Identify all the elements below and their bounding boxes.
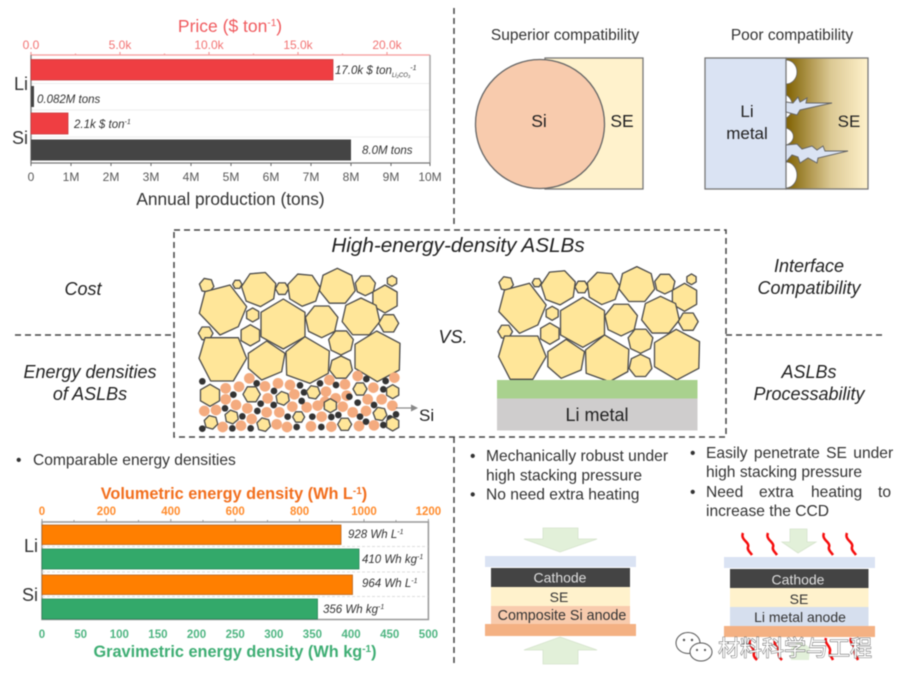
label: interface compatibility: Interface — [774, 256, 844, 276]
SE block with gradient — [786, 58, 868, 189]
gravimetric tick labels: 100 — [110, 629, 129, 641]
category labels — [12, 74, 28, 148]
panel: poor compatibility — [705, 27, 868, 189]
panel: cost bar chart — [12, 16, 442, 209]
bar value labels: -1 — [410, 65, 417, 72]
SE layer: SE — [550, 589, 568, 605]
bullet text: • — [16, 452, 21, 469]
bar value labels: 964 Wh L — [362, 578, 411, 590]
price axis tick labels: 20.0k — [372, 38, 403, 52]
production axis tick labels: 9M — [383, 170, 399, 184]
volumetric tick labels: 200 — [97, 506, 116, 518]
heading: Poor compatibility — [731, 27, 853, 44]
labels: SE — [610, 111, 634, 131]
panel: energy density chart — [16, 452, 441, 661]
arrow: bottom pressure — [524, 637, 597, 664]
bullet text: to — [878, 484, 891, 501]
bullet text: Need — [706, 484, 743, 501]
price axis tick labels: 0.0 — [23, 38, 40, 52]
bar value labels: 8.0M tons — [362, 145, 413, 157]
volumetric tick labels: 0 — [39, 506, 45, 518]
gravimetric axis title: -1 — [362, 644, 372, 655]
bullet text: extra — [759, 484, 794, 501]
green interlayer — [497, 380, 698, 398]
bullet text: high stacking pressure — [486, 468, 642, 484]
volumetric axis title: -1 — [353, 486, 362, 497]
cathode layer — [730, 569, 868, 588]
SE layer: SE — [790, 591, 808, 607]
gravimetric axis title: ) — [371, 643, 377, 661]
gravimetric tick labels: 500 — [419, 629, 438, 641]
category labels: Si — [22, 585, 38, 605]
text: VS.: VS. — [438, 327, 468, 347]
bar value labels: -1 — [411, 578, 418, 585]
bottom plate — [485, 624, 636, 636]
gravimetric tick labels: 450 — [380, 629, 399, 641]
solid electrolyte particles — [196, 382, 402, 433]
gravimetric tick labels: 250 — [226, 629, 245, 641]
gravimetric tick labels: 350 — [303, 629, 322, 641]
bar value labels: 356 Wh kg — [323, 604, 378, 616]
SE layer — [491, 587, 630, 606]
production axis tick labels: 3M — [143, 170, 159, 184]
bullet text: • — [470, 448, 475, 465]
Li metal block — [705, 58, 786, 189]
production axis tick labels: 6M — [263, 170, 279, 184]
cathode layer — [491, 568, 630, 587]
labels: SE — [838, 112, 860, 131]
category labels: Li — [14, 74, 28, 94]
gravimetric tick labels: 0 — [39, 629, 45, 641]
bullet text: No need extra heating — [486, 486, 639, 504]
heat waves: bottom — [750, 638, 858, 660]
label: interface compatibility: Compatibility — [757, 278, 862, 298]
production axis tick labels: 1M — [63, 170, 79, 184]
composite Si anode layer: Composite Si anode — [498, 608, 626, 624]
SE block — [545, 58, 643, 189]
category labels — [22, 536, 38, 605]
gravimetric tick labels: 300 — [264, 629, 283, 641]
production axis tick labels: 10M — [418, 170, 442, 184]
labels — [726, 102, 860, 143]
Si particle — [476, 60, 604, 188]
panel: superior compatibility — [476, 27, 643, 189]
bar: Li price — [31, 60, 333, 80]
volumetric tick labels: 1200 — [416, 506, 441, 518]
cathode layer: Cathode — [772, 572, 825, 588]
arrow: top pressure — [524, 528, 597, 552]
top plate — [724, 557, 875, 568]
panel: central comparison box — [174, 230, 726, 437]
price axis tick labels: 15.0k — [283, 38, 314, 52]
section labels — [23, 256, 866, 404]
gravimetric tick labels: 200 — [187, 629, 206, 641]
volumetric tick labels: 600 — [226, 506, 245, 518]
bullet text: increase the CCD — [706, 503, 829, 520]
bar: Si production — [31, 140, 351, 160]
bar value labels: 2.1k $ ton — [74, 119, 125, 131]
bullet text: Mechanically robust under — [486, 448, 668, 465]
price axis tick labels: 10.0k — [194, 38, 225, 52]
category labels: Li — [24, 536, 38, 556]
interface voids — [786, 60, 797, 188]
bullet text: • — [470, 486, 475, 504]
heading: price axis title: Price ($ ton — [178, 16, 267, 36]
panel: Li metal processability — [690, 445, 893, 660]
volumetric tick labels — [39, 506, 441, 518]
production axis tick labels: 7M — [303, 170, 319, 184]
bar: Si price — [31, 113, 68, 134]
bottom plate — [724, 626, 875, 637]
arrow: top pressure — [782, 529, 816, 553]
bullet text — [690, 445, 893, 520]
category labels: Si — [12, 128, 28, 148]
volumetric tick labels: 400 — [161, 506, 180, 518]
title: High-energy-density ASLBs — [331, 234, 585, 257]
bar value labels: Li₂CO₃ — [392, 73, 411, 79]
volumetric axis title: ) — [362, 485, 367, 503]
production axis tick labels: 2M — [103, 170, 119, 184]
heading: price axis title: -1 — [267, 18, 277, 29]
bar: Si gravimetric — [42, 599, 318, 619]
bar value labels: -1 — [125, 119, 131, 126]
gravimetric axis title: Gravimetric energy density (Wh kg — [93, 643, 362, 661]
lithium dendrites — [786, 97, 848, 163]
bar: Li volumetric — [42, 525, 341, 544]
SE layer — [730, 588, 868, 607]
arrow: bottom pressure — [791, 640, 810, 660]
bar value labels: 410 Wh kg — [362, 554, 417, 566]
bar value labels — [323, 529, 423, 616]
bullet text: heating — [811, 484, 862, 501]
gravimetric tick labels — [39, 629, 438, 641]
bar value labels: 928 Wh L — [348, 529, 397, 541]
panel: composite Si processability — [470, 448, 668, 664]
bullet text: Easily penetrate SE under — [706, 445, 893, 462]
production axis tick labels: 0 — [28, 170, 35, 184]
heading: price axis title: ) — [276, 16, 282, 36]
bullet text: • — [690, 445, 695, 462]
bar: Li gravimetric — [42, 549, 359, 569]
Li metal anode layer — [730, 607, 868, 626]
labels: Li — [740, 102, 754, 121]
cathode layer: Cathode — [534, 570, 587, 586]
volumetric tick labels: 800 — [290, 506, 309, 518]
cathode particles: composite Si cell — [198, 268, 403, 383]
labels: metal — [726, 124, 768, 143]
price axis tick labels — [23, 38, 403, 52]
label: energy densities: Energy densities — [23, 362, 157, 382]
production axis tick labels — [28, 170, 442, 184]
label: cost: Cost — [64, 279, 103, 299]
heat waves: top — [742, 533, 856, 555]
top plate — [485, 556, 636, 567]
bullet text: • — [690, 484, 695, 501]
bullet text: high stacking pressure — [706, 464, 862, 481]
labels: Si — [531, 111, 547, 131]
labels — [531, 111, 634, 131]
production axis tick labels: 4M — [183, 170, 199, 184]
production axis tick labels: 5M — [223, 170, 239, 184]
composite Si anode layer — [196, 371, 402, 433]
Li metal anode layer: Li metal anode — [754, 609, 846, 625]
watermark text: 材料科学与工程 — [718, 631, 872, 663]
bar value labels — [37, 65, 417, 157]
bar value labels: 17.0k $ ton — [335, 65, 392, 77]
icon: chat bubbles — [676, 632, 712, 661]
bar value labels: -1 — [397, 529, 404, 536]
gravimetric tick labels: 50 — [74, 629, 87, 641]
arrow and Si label: Si — [419, 406, 434, 425]
gravimetric tick labels: 150 — [148, 629, 167, 641]
label: processability: Processability — [753, 384, 866, 404]
cathode particles: Li metal cell — [498, 267, 703, 382]
gravimetric tick labels: 400 — [342, 629, 361, 641]
label: energy densities: of ASLBs — [53, 384, 127, 404]
Li metal layer — [497, 398, 698, 430]
bar value labels: -1 — [417, 554, 423, 561]
bar: Si volumetric — [42, 575, 352, 594]
bar value labels: 0.082M tons — [37, 94, 101, 106]
production axis title: Annual production (tons) — [136, 189, 325, 209]
bar: Li production — [31, 86, 34, 107]
arrow and Si label — [396, 404, 434, 425]
heading: Superior compatibility — [491, 27, 639, 44]
Li metal layer: Li metal — [565, 405, 629, 425]
label: processability: ASLBs — [781, 362, 837, 382]
silicon particles — [199, 371, 400, 432]
bar value labels: -1 — [378, 604, 384, 611]
price axis tick labels: 5.0k — [109, 38, 132, 52]
production axis tick labels: 8M — [343, 170, 359, 184]
carbon particles — [199, 376, 399, 432]
volumetric tick labels: 1000 — [351, 506, 377, 518]
volumetric axis title: Volumetric energy density (Wh L — [101, 485, 353, 503]
watermark — [676, 631, 872, 663]
bullet text: Comparable energy densities — [33, 452, 236, 469]
